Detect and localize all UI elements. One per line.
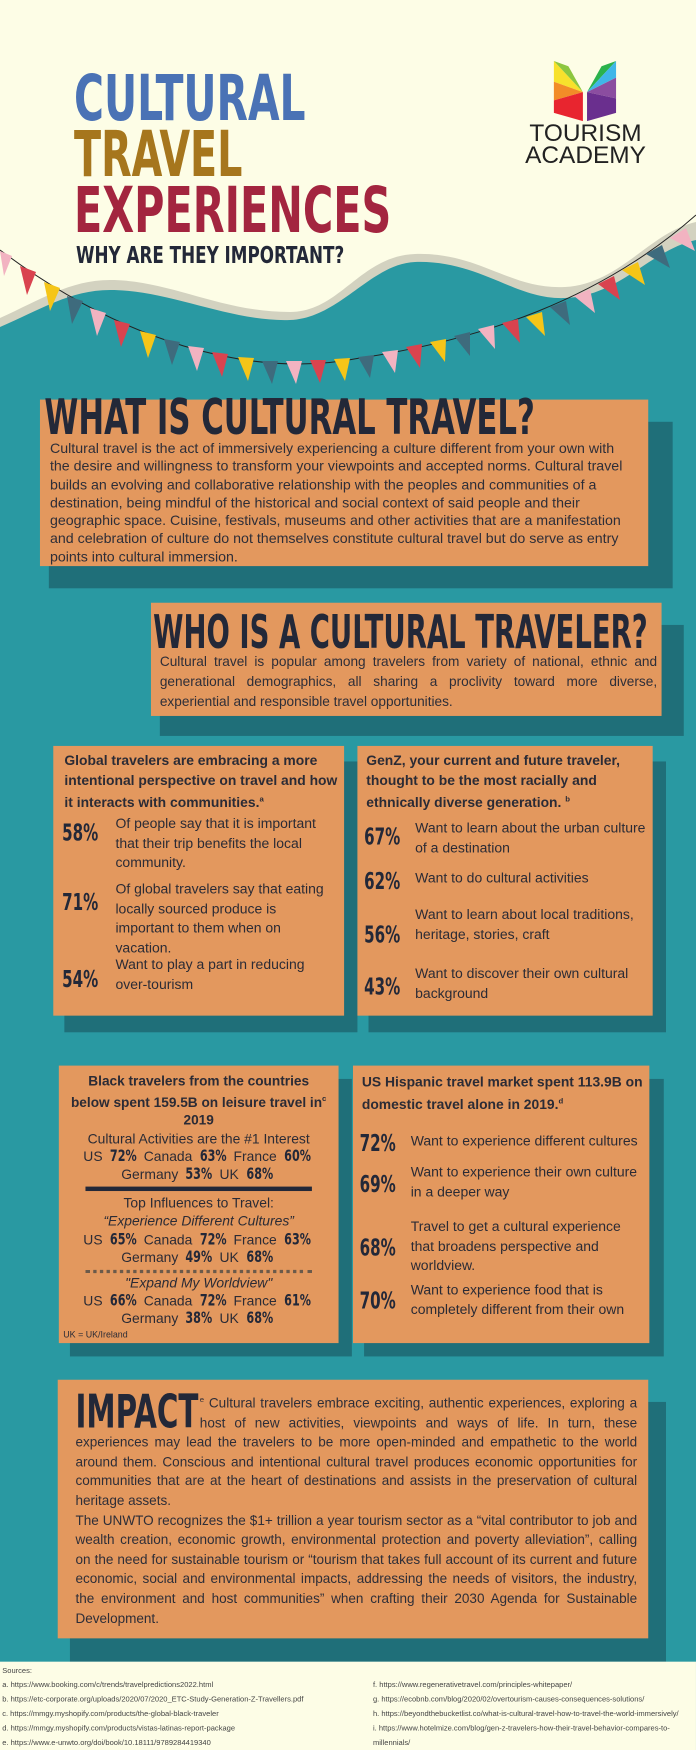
stats: top influences: 72% — [200, 1231, 226, 1248]
title — [74, 71, 404, 239]
panel: global travelers: 58% — [62, 819, 98, 846]
text: impact — [75, 1391, 637, 1629]
text: who description: Cultural travel is popular among travelers from variety of national, ethnic and generational demographics, all sharing a proclivity toward more diverse, experiential and responsible travel opportunities. — [160, 654, 657, 709]
text: impact: e Cultural travelers embrace exciting, authentic experiences, exploring a host of new activities, viewpoints and ways of life. In turn, these experiences may lead the travelers to be more open-minded and empathetic to the world around them. Conscious and intentional cultural travel produces economic opportunities for communities that are at the heart of destinations and assists in the preservation of cultural heritage assets. — [75, 1395, 637, 1509]
panel: GenZ: Want to learn about the urban culture of a destination — [415, 820, 645, 855]
subtitle: WHY ARE THEY IMPORTANT? — [76, 243, 344, 269]
text: definition: Cultural travel is the act of immersively experiencing a culture different from your own with the desire and willingness to transform your viewpoints and accepted norms. Cultural travel builds an evolving and collaborative relationship with the peoples and communities of a destination, being mindful of the historical and social context of said people and their geographic space. Cuisine, festivals, museums and other activities that are a manifestation and celebration of culture do not themselves constitute cultural travel but do serve as entry points into cultural immersion. — [50, 440, 622, 565]
panel: US Hispanic — [353, 1066, 664, 1356]
panel: global travelers: Of global travelers say that eating locally sourced produce is important to them when on vacation. — [115, 881, 324, 955]
sources: d. https://mmgy.myshopify.com/products/vistas-latinas-report-package — [2, 1725, 235, 1733]
heading: Global travelers are embracing a more intentional perspective on travel and how it interacts with communities.a — [64, 753, 337, 810]
panel: who is a cultural traveler — [151, 603, 684, 736]
stats: top influences: 63% — [284, 1231, 311, 1248]
panel: US Hispanic: 68% — [360, 1234, 396, 1261]
panel: what is cultural travel — [40, 400, 673, 588]
stats: cultural activities: 72% — [110, 1148, 137, 1165]
panel: impact — [58, 1380, 666, 1662]
stats: cultural activities: US Canada France — [83, 1149, 277, 1164]
stats: cultural activities — [59, 1130, 339, 1183]
stats: cultural activities: 63% — [200, 1148, 226, 1165]
sources: millennials/ — [373, 1739, 410, 1747]
panel: black travelers: 66% — [110, 1292, 137, 1310]
panel: GenZ: 56% — [364, 921, 400, 948]
panel: US Hispanic: Want to experience food that is completely different from their own — [411, 1282, 624, 1317]
heading: GenZ, your current and future traveler, thought to be the most racially and ethnically diverse generation. b — [366, 753, 620, 810]
panel: GenZ: Want to learn about local traditions, heritage, stories, craft — [415, 907, 634, 942]
stats: top influences: Germany UK — [121, 1250, 239, 1265]
panel: black travelers: 68% — [246, 1310, 273, 1328]
stats: top influences — [59, 1195, 339, 1267]
sources: c. https://mmgy.myshopify.com/products/the-global-black-traveler — [2, 1711, 219, 1718]
panel: global travelers — [53, 746, 357, 1032]
stats: top influences: Top Influences to Travel: — [123, 1196, 274, 1211]
sources: e. https://www.e-unwto.org/doi/book/10.18111/9789284419340 — [2, 1739, 211, 1747]
panel: black travelers: 72% — [200, 1292, 226, 1310]
panel: GenZ: 43% — [364, 973, 400, 1000]
panel: GenZ: 67% — [364, 824, 400, 850]
panel: US Hispanic: Want to experience their own culture in a deeper way — [411, 1164, 637, 1199]
text: impact: IMPACT — [75, 1384, 198, 1439]
panel: GenZ: 62% — [364, 868, 400, 895]
stats: top influences: 49% — [186, 1249, 212, 1266]
panel: global travelers: Want to play a part in reducing over-tourism — [115, 957, 305, 992]
heading: Black travelers from the countries — [88, 1073, 309, 1089]
logo: Tourism Academy — [516, 61, 655, 172]
sources — [0, 1662, 696, 1750]
heading: what is cultural travel: WHAT IS CULTURAL TRAVEL? — [44, 390, 535, 446]
heading: below spent 159.5B on leisure travel inc — [71, 1094, 326, 1110]
stats: top influences: 65% — [110, 1231, 137, 1248]
panel: global travelers: 71% — [62, 889, 98, 916]
logo: Tourism Academy: TOURISM — [529, 119, 642, 147]
panel: US Hispanic: Travel to get a cultural experience that broadens perspective and worldview. — [411, 1219, 621, 1273]
stats: cultural activities: Germany UK — [121, 1167, 239, 1182]
panel: global travelers: 54% — [62, 966, 98, 992]
panel: black travelers: "Expand My Worldview" — [125, 1275, 272, 1291]
title: EXPERIENCES — [74, 174, 391, 247]
panel: US Hispanic: 72% — [360, 1130, 396, 1157]
panel: black travelers: UK = UK/Ireland — [63, 1330, 128, 1340]
logo: Tourism Academy: ACADEMY — [525, 141, 646, 169]
stats: cultural activities: 53% — [186, 1166, 212, 1183]
sources: f. https://www.regenerativetravel.com/principles-whitepaper/ — [373, 1682, 572, 1689]
stats: cultural activities: Cultural Activities are the #1 Interest — [88, 1131, 310, 1146]
panel: black travelers — [59, 1066, 352, 1356]
panel: black travelers: 61% — [284, 1292, 311, 1310]
heading: US Hispanic travel market spent 113.9B on domestic travel alone in 2019.d — [362, 1074, 643, 1112]
stats: top influences: “Experience Different Cultures” — [103, 1214, 294, 1229]
text: impact: The UNWTO recognizes the $1+ trillion a year tourism sector as a “vital contributor to job and wealth creation, economic growth, environmental protection and poverty alleviation”, calling on the need for sustainable tourism or “tourism that takes full account of its current and future economic, social and environmental impacts, addressing the needs of visitors, the industry, the environment and host communities” when crafting their 2030 Agenda for Sustainable Development. — [75, 1513, 637, 1626]
stats: top influences: US Canada France — [83, 1232, 277, 1247]
panel: GenZ — [357, 746, 666, 1032]
panel: GenZ: Want to do cultural activities — [415, 870, 589, 886]
heading: 2019 — [183, 1112, 214, 1128]
panel: GenZ: Want to discover their own cultural background — [415, 966, 628, 1001]
panel: US Hispanic: Want to experience different cultures — [411, 1133, 638, 1149]
title: TRAVEL — [74, 118, 242, 191]
heading — [59, 1066, 339, 1130]
title: CULTURAL — [74, 62, 306, 135]
panel: US Hispanic: 69% — [360, 1171, 396, 1198]
sources: Sources: — [2, 1667, 32, 1675]
header background with waves and bunting — [0, 0, 696, 395]
panel: black travelers: Germany UK — [121, 1311, 239, 1327]
panel: black travelers: US Canada France — [83, 1293, 277, 1309]
heading: who is a cultural traveler: WHO IS A CULTURAL TRAVELER? — [153, 605, 648, 659]
panel: US Hispanic: 70% — [360, 1288, 396, 1314]
sources: b. https://etc-corporate.org/uploads/2020/07/2020_ETC-Study-Generation-Z-Travellers.pdf — [2, 1696, 303, 1704]
sources: g. https://ecobnb.com/blog/2020/02/overtourism-causes-consequences-solutions/ — [373, 1696, 644, 1704]
sources: i. https://www.hotelmize.com/blog/gen-z-travelers-how-their-travel-behavior-compares-to- — [373, 1725, 670, 1733]
panel: global travelers: Of people say that it is important that their trip benefits the local community. — [115, 816, 316, 870]
stats: cultural activities: 60% — [284, 1148, 311, 1165]
stats: top influences: 68% — [246, 1249, 273, 1266]
stats: cultural activities: 68% — [246, 1166, 273, 1183]
sources: a. https://www.booking.com/c/trends/travelpredictions2022.html — [2, 1682, 213, 1689]
sources: h. https://beyondthebucketlist.co/what-is-cultural-travel-how-to-travel-the-world-immersively/ — [373, 1711, 679, 1718]
panel: black travelers: 38% — [186, 1310, 212, 1328]
